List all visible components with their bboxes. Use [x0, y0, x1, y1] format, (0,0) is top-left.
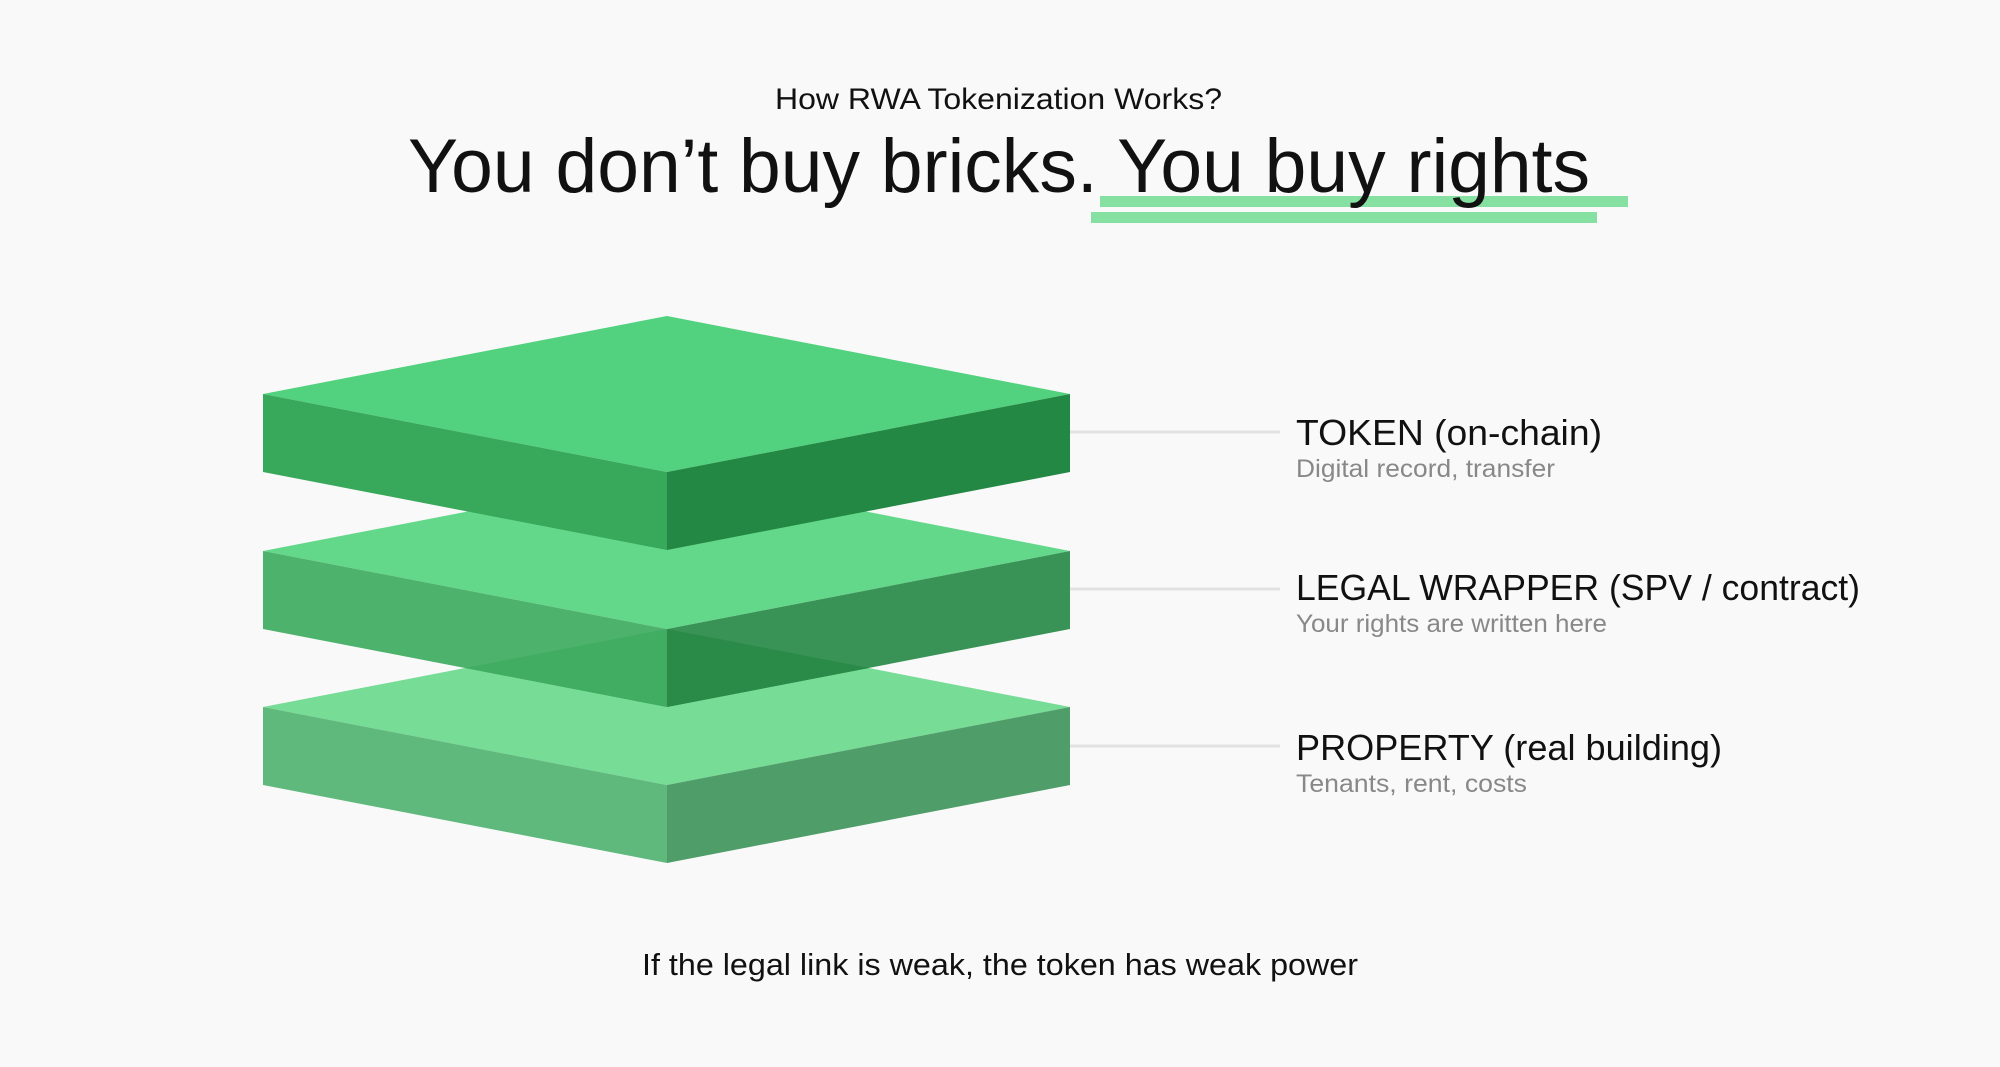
layer: legal wrapper (middle slab) [263, 473, 1070, 707]
footer note: If the legal link is weak, the token has weak power [642, 947, 1358, 982]
layer stack diagram [263, 316, 1070, 863]
label: property: PROPERTY (real building) [1296, 727, 1722, 768]
label: token: Digital record, transfer [1296, 455, 1555, 483]
layer: property (bottom slab) [263, 629, 1070, 863]
label: legal wrapper: Your rights are written here [1296, 610, 1607, 638]
label: token: TOKEN (on-chain) [1296, 412, 1602, 453]
label: property: Tenants, rent, costs [1296, 770, 1527, 798]
highlight underline [1091, 196, 1628, 223]
subtitle: How RWA Tokenization Works?: How RWA Tokenization Works? [775, 83, 1222, 116]
label: property [1296, 727, 1722, 798]
label: legal wrapper: LEGAL WRAPPER (SPV / contract) [1296, 567, 1860, 608]
label: token [1296, 412, 1602, 483]
label: legal wrapper [1296, 567, 1860, 638]
layer: token (top slab) [263, 316, 1070, 550]
connector lines [1070, 432, 1280, 746]
main heading: You don’t buy bricks. You buy rights [408, 124, 1590, 209]
